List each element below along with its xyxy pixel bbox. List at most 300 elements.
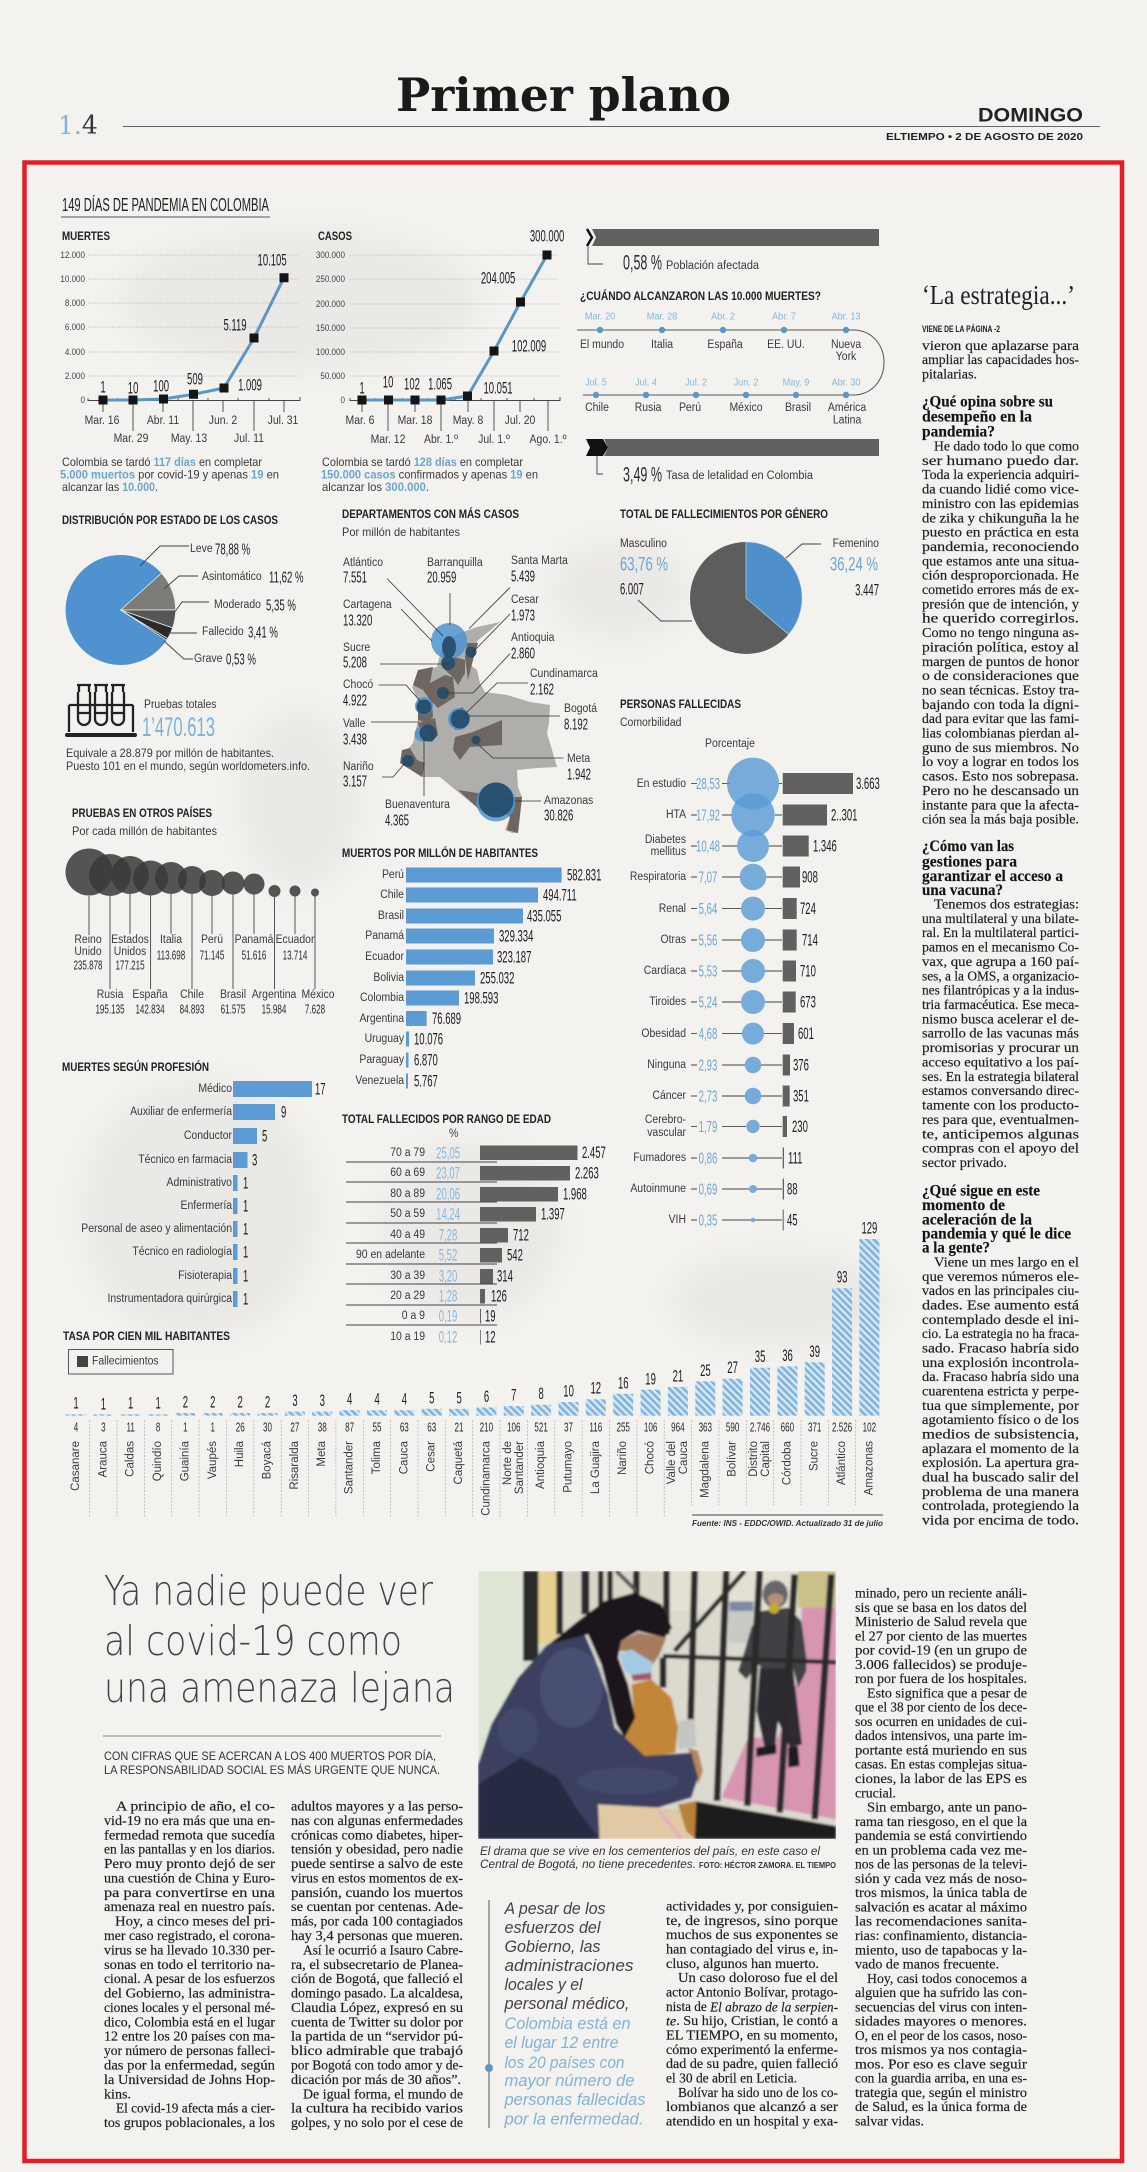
- body column 1: del Gobierno, las administra-: [104, 1987, 275, 2002]
- bar chart: muertes según profesión: Personal de aseo y alimentación: [81, 1223, 232, 1235]
- rate values: 4: [402, 1390, 407, 1408]
- interview column: [922, 280, 1080, 1528]
- comorbidity chart: personas fallecidas: 0,86: [699, 1149, 717, 1167]
- pull quote: Gobierno, las: [504, 1938, 600, 1956]
- answer 1: piración política, estoy al: [922, 640, 1079, 655]
- answer 1: no sean técnicas. Estoy tra-: [922, 684, 1079, 698]
- map: departamentos con más casos: Chocó: [343, 679, 373, 691]
- chart heading: MUERTES: [62, 229, 110, 243]
- chart: casos: 10.051: [483, 379, 513, 397]
- answer 2: acceso equitativo a los paí-: [922, 1056, 1079, 1070]
- hatched bars: [66, 1239, 879, 1416]
- department names: Guainía: [179, 1440, 191, 1481]
- question 1: pandemia?: [922, 424, 995, 440]
- bubble chart: pruebas en otros países: Por cada millón de habitantes: [72, 824, 217, 838]
- bar chart: muertes según profesión: Instrumentadora quirúrgica: [107, 1293, 233, 1305]
- table chart: fallecidos por rango de edad: 1.397: [541, 1205, 565, 1223]
- comorbidity chart: personas fallecidas: 0,69: [699, 1180, 717, 1198]
- table chart: fallecidos por rango de edad: 12: [485, 1328, 496, 1346]
- answer 2: ral. En la multilateral partici-: [922, 926, 1079, 941]
- body column 2: domingo pasado. La alcaldesa,: [291, 1987, 463, 2002]
- comorbidity chart: personas fallecidas: Cáncer: [652, 1090, 686, 1102]
- bar chart: muertes según profesión: Técnico en radiología: [132, 1246, 233, 1258]
- timeline: cuándo alcanzaron las 10.000 muertes: Mar. 28: [647, 311, 678, 323]
- answer 3: Viene un mes largo en el: [934, 1256, 1079, 1270]
- pull quote: esfuerzos del: [504, 1919, 602, 1937]
- chart: muertes: 6.000: [65, 322, 85, 332]
- bar chart: muertos por millón de habitantes: [342, 845, 601, 1090]
- answer 3: controlada, protegiendo la: [922, 1499, 1080, 1514]
- chart note: alcanzar los 300.000.: [322, 480, 429, 494]
- body column 1: El covid-19 afecta más a cier-: [116, 2102, 275, 2117]
- pie heading: TOTAL DE FALLECIMIENTOS POR GÉNERO: [620, 506, 828, 521]
- chart: muertes: Jun. 2: [209, 415, 237, 427]
- death values: 27: [290, 1421, 299, 1435]
- department names: Cauca: [678, 1440, 690, 1474]
- chart heading: MUERTES SEGÚN PROFESIÓN: [62, 1059, 209, 1074]
- answer 1: Toda la experiencia adquiri-: [922, 468, 1079, 483]
- body column 1: [104, 1800, 276, 2131]
- pie chart: distribución por estado: Grave: [194, 653, 222, 665]
- body column 4: salvar vidas.: [855, 2114, 924, 2130]
- body column 3: cluso, algunos han muerto.: [666, 1957, 819, 1972]
- body column 3: han contagiado del virus e, in-: [666, 1942, 838, 1958]
- comorbidity chart: personas fallecidas: 111: [788, 1149, 802, 1167]
- body column 3: te, de ingresos, sino porque: [666, 1914, 838, 1929]
- death values: 8: [156, 1421, 160, 1435]
- map: departamentos con más casos: Sucre: [343, 642, 370, 654]
- chart: muertes: May. 13: [171, 433, 207, 445]
- comorbidity chart: personas fallecidas: 88: [787, 1180, 798, 1198]
- chart: muertes: 1: [100, 378, 106, 396]
- map: departamentos con más casos: Santa Marta: [511, 555, 569, 567]
- pull quote: locales y el: [504, 1976, 584, 1994]
- table chart: fallecidos por rango de edad: 2.457: [582, 1143, 606, 1162]
- body column 2: blico admirable que trabajó: [291, 2044, 463, 2059]
- body column 1: vid-19 no era más que una en-: [104, 1814, 275, 1829]
- comorbidity chart: personas fallecidas: mellitus: [651, 846, 686, 858]
- bar chart: muertos por millón de habitantes: Bolivia: [373, 972, 405, 984]
- pie chart: género: [620, 506, 879, 654]
- timeline: cuándo alcanzaron las 10.000 muertes: Jul. 4: [635, 377, 657, 389]
- department names: Cauca: [398, 1440, 410, 1474]
- bar chart: muertes según profesión: Técnico en farmacia: [138, 1154, 233, 1166]
- department names: Bolívar: [727, 1441, 739, 1477]
- bar chart: muertos por millón de habitantes: 76.689: [432, 1009, 461, 1028]
- comorbidity chart: personas fallecidas: 0,35: [699, 1211, 717, 1229]
- body column 1: kins.: [104, 2087, 131, 2102]
- chart: casos: Ago. 1.º: [530, 434, 566, 446]
- timeline: cuándo alcanzaron las 10.000 muertes: Brasil: [785, 402, 811, 414]
- map of Colombia: [400, 622, 557, 833]
- bubble chart: pruebas en otros países: [66, 805, 335, 1017]
- table chart: fallecidos por rango de edad: 40 a 49: [390, 1229, 425, 1241]
- chart: muertes: 509: [187, 370, 203, 388]
- department names: Arauca: [97, 1440, 109, 1477]
- pull quote: personal médico,: [504, 1995, 630, 2013]
- comorbidity chart: personas fallecidas: 601: [798, 1024, 814, 1043]
- answer 2: res para que, eventualmen-: [922, 1113, 1079, 1128]
- comorbidity chart: personas fallecidas: 5,53: [699, 962, 717, 980]
- death values: 87: [345, 1421, 354, 1435]
- answer 3: contemplado desde el ini-: [922, 1313, 1079, 1328]
- table chart: fallecidos por rango de edad: 19: [485, 1307, 496, 1325]
- body column 2: nas con algunas enfermedades: [291, 1814, 463, 1829]
- body column 4: 3.006 fallecidos) se produje-: [855, 1658, 1027, 1673]
- timeline: cuándo alcanzaron las 10.000 muertes: México: [729, 402, 763, 414]
- map heading: DEPARTAMENTOS CON MÁS CASOS: [342, 506, 519, 521]
- chart note: [321, 455, 538, 494]
- section title: Primer plano: [396, 68, 731, 122]
- table chart: fallecidos por rango de edad: 7,28: [439, 1226, 458, 1244]
- department names: Cesar: [426, 1441, 438, 1472]
- death values: 1: [211, 1421, 215, 1435]
- map: departamentos con más casos: Nariño: [343, 761, 374, 773]
- map: departamentos con más casos: 3.157: [343, 772, 367, 790]
- death values: 210: [480, 1421, 493, 1435]
- chart: muertes: 0: [81, 395, 85, 405]
- department names: Distrito: [748, 1441, 760, 1477]
- bubble chart: pruebas en otros países: Italia: [160, 934, 183, 946]
- department names: Valle del: [666, 1441, 678, 1484]
- bubbles: [727, 758, 779, 1222]
- map: departamentos con más casos: Antioquia: [511, 632, 555, 644]
- death values: 37: [564, 1421, 573, 1435]
- photo caption: FOTO: HÉCTOR ZAMORA. EL TIEMPO: [699, 1861, 836, 1870]
- table chart: fallecidos por rango de edad: 80 a 89: [390, 1188, 425, 1200]
- death values: 26: [236, 1421, 245, 1435]
- answer 2: tria farmacéutica. Ese meca-: [922, 998, 1079, 1013]
- map: departamentos con más casos: 5.208: [343, 653, 367, 671]
- department names: Córdoba: [781, 1440, 793, 1485]
- body column 2: Así le ocurrió a Isauro Cabre-: [303, 1943, 463, 1958]
- body column 1: fermedad remota que sucedía: [104, 1828, 276, 1843]
- comorbidity chart: personas fallecidas: Diabetes: [645, 834, 686, 846]
- answer 1: casos. Esto nos sobrepasa.: [922, 770, 1079, 785]
- table chart: fallecidos por rango de edad: 712: [513, 1226, 529, 1244]
- body column 4: sión y cada vez más de noso-: [855, 1872, 1027, 1887]
- bubble chart: pruebas en otros países: 15.984: [262, 1003, 286, 1017]
- table chart: fallecidos por rango de edad: 0,19: [439, 1307, 457, 1325]
- table chart: fallecidos por rango de edad: 20 a 29: [390, 1290, 425, 1302]
- department names: Santander: [344, 1441, 356, 1494]
- answer 2: nismo busca acelerar el de-: [922, 1012, 1079, 1027]
- timeline: cuándo alcanzaron las 10.000 muertes: Jul. 2: [685, 377, 707, 389]
- map: departamentos con más casos: Cartagena: [343, 599, 392, 611]
- table chart: fallecidos por rango de edad: [342, 1112, 606, 1346]
- question 1: desempeño en la: [922, 408, 1032, 426]
- timeline heading: ¿CUÁNDO ALCANZARON LAS 10.000 MUERTES?: [580, 288, 821, 303]
- chart heading: TOTAL FALLECIDOS POR RANGO DE EDAD: [342, 1112, 551, 1126]
- timeline: cuándo alcanzaron las 10.000 muertes: York: [836, 351, 857, 363]
- bubble chart: pruebas en otros países: 61.575: [221, 1003, 245, 1017]
- body column 4: las recomendaciones sanita-: [855, 1915, 1027, 1930]
- answer 1: margen de puntos de honor: [922, 655, 1079, 670]
- body column 1: una cuestión de China y Euro-: [104, 1872, 275, 1886]
- department names: La Guajira: [590, 1440, 602, 1494]
- rate values: 1: [73, 1394, 79, 1412]
- chart: casos: May. 8: [453, 415, 483, 427]
- bar chart: muertos por millón de habitantes: Ecuador: [365, 951, 404, 963]
- timeline: cuándo alcanzaron las 10.000 muertes: Jun. 2: [734, 377, 758, 389]
- answer 3: vados en las principales ciu-: [922, 1284, 1079, 1299]
- question 1: [922, 394, 1053, 440]
- answer 1: ser humano puedo dar.: [922, 454, 1079, 469]
- table chart: fallecidos por rango de edad: 314: [497, 1267, 513, 1285]
- body column 3: dad de su padre, quien falleció: [666, 2057, 838, 2072]
- body column 3: nista de El abrazo de la serpien-: [666, 2000, 838, 2015]
- bar chart: muertes según profesión: 5: [262, 1127, 268, 1145]
- death values: 363: [699, 1421, 712, 1435]
- chart note: alcanzar las 10.000.: [62, 480, 158, 494]
- table chart: fallecidos por rango de edad: 25,05: [436, 1144, 460, 1162]
- body column 4: rias: confinamiento, distancia-: [855, 1929, 1027, 1944]
- infographic title: 149 DÍAS DE PANDEMIA EN COLOMBIA: [62, 195, 269, 215]
- bar chart: muertos por millón de habitantes: Chile: [380, 889, 404, 901]
- answer 3: aplazara el momento de la: [922, 1442, 1080, 1457]
- death values: 38: [318, 1421, 327, 1435]
- bar chart: muertes según profesión: 1: [243, 1197, 248, 1215]
- death values: 63: [400, 1421, 409, 1435]
- map: departamentos con más casos: Cesar: [511, 594, 539, 606]
- body column 3: cómo experimentó la enferme-: [666, 2043, 838, 2058]
- rate values: 93: [837, 1268, 848, 1286]
- chart: casos: Mar. 12: [371, 434, 405, 446]
- bar chart: muertes según profesión: [62, 1059, 326, 1308]
- body column 4: Hoy, casi todos conocemos a: [867, 1972, 1028, 1987]
- answer 1: He dado todo lo que como: [934, 440, 1079, 454]
- comorbidity chart: personas fallecidas: 2,93: [699, 1056, 717, 1074]
- chart heading: PERSONAS FALLECIDAS: [620, 697, 741, 711]
- rate values: [73, 1219, 877, 1413]
- bar chart: muertes según profesión: 1: [243, 1267, 248, 1285]
- table chart: fallecidos por rango de edad: 3,20: [439, 1267, 458, 1285]
- comorbidity chart: personas fallecidas: Cardíaca: [644, 965, 687, 977]
- department names: Antioquia: [535, 1440, 547, 1489]
- bubble chart: pruebas en otros países: 142.834: [135, 1003, 165, 1017]
- timeline: cuándo alcanzaron las 10.000 muertes: España: [707, 339, 743, 351]
- pruebas totales: Puesto 101 en el mundo, según worldometers.info.: [66, 759, 310, 773]
- death values: 30: [263, 1421, 272, 1435]
- chart: casos: 100.000: [316, 347, 345, 357]
- bubble chart: pruebas en otros países: 51.616: [242, 949, 266, 963]
- stat bar: tasa de letalidad: 3,49 %: [623, 464, 662, 486]
- answer 3: cuarentena estricta y perpe-: [922, 1384, 1079, 1400]
- bar chart: muertos por millón de habitantes: 10.076: [414, 1030, 443, 1048]
- question 3: [922, 1182, 1071, 1256]
- rate values: 39: [809, 1342, 820, 1361]
- body column 4: alguien que ha sufrido las con-: [855, 1986, 1027, 2001]
- rate values: 2: [183, 1393, 188, 1411]
- chart: casos: Abr. 1.º: [424, 434, 458, 446]
- body column 2: por Bogotá con todo amor y de-: [291, 2058, 463, 2074]
- body column 4: rama tan riesgoso, en el que la: [855, 1815, 1028, 1830]
- department names: Huila: [234, 1440, 246, 1467]
- table chart: fallecidos por rango de edad: 60 a 69: [390, 1167, 425, 1179]
- bubble chart: pruebas en otros países: 13.714: [283, 949, 307, 963]
- body column 4: nos de las personas de la televi-: [855, 1858, 1027, 1873]
- table chart: fallecidos por rango de edad: 10 a 19: [390, 1331, 425, 1343]
- comorbidity chart: personas fallecidas: Renal: [659, 902, 686, 915]
- pull quote: el lugar 12 entre: [504, 2034, 618, 2052]
- comorbidity chart: personas fallecidas: 3.663: [856, 774, 880, 793]
- question 2: ¿Cómo van las: [922, 838, 1014, 855]
- department names: Casanare: [70, 1441, 82, 1491]
- table chart: fallecidos por rango de edad: 20,06: [436, 1185, 460, 1203]
- answer 3: sado. Fracaso habría sido: [922, 1342, 1079, 1356]
- map: departamentos con más casos: Bogotá: [564, 703, 598, 715]
- department names: Sucre: [809, 1441, 821, 1471]
- question 2: gestiones para: [922, 854, 1017, 870]
- body column 2: hay 3,4 personas que mueren.: [291, 1929, 463, 1944]
- comorbidity chart: personas fallecidas: vascular: [647, 1127, 686, 1139]
- chart note: [60, 455, 279, 494]
- body column 3: lombianos que alcanzó a ser: [666, 2100, 838, 2115]
- pull quote: A pesar de los: [504, 1900, 606, 1918]
- body column 4: ciones, la labor de las EPS es: [855, 1772, 1027, 1787]
- chart note: 5.000 muertos por covid-19 y apenas 19 en: [60, 468, 279, 482]
- answer 2: tamente con los producto-: [922, 1098, 1079, 1114]
- comorbidity chart: personas fallecidas: Tiroides: [649, 996, 686, 1008]
- death values: 106: [644, 1421, 657, 1435]
- answer 1: pandemia, reconociendo: [922, 540, 1079, 555]
- chart: casos: 102: [404, 375, 420, 393]
- body column 4: secuencias del virus con inten-: [855, 2000, 1027, 2015]
- pie chart: distribución por estado: Moderado: [214, 599, 261, 611]
- timeline: cuándo alcanzaron las 10.000 muertes: Nueva: [831, 339, 862, 351]
- answer 3: vida por encima de todo.: [922, 1513, 1079, 1528]
- bar chart: muertos por millón de habitantes: Venezuela: [355, 1075, 405, 1087]
- answer 1: bajando con toda la digni-: [922, 698, 1079, 713]
- timeline: cuándo alcanzaron las 10.000 muertes: Mar. 20: [585, 311, 616, 323]
- question 2: [922, 838, 1063, 899]
- chart: muertes: Jul. 31: [268, 415, 298, 427]
- chart: muertes: [60, 229, 300, 494]
- chart: muertes: Mar. 16: [85, 415, 119, 427]
- body column 2: [291, 1800, 463, 2131]
- timeline: cuándo alcanzaron las 10.000 muertes: Jul. 5: [585, 377, 607, 389]
- answer 3: da. Fracaso habría sido una: [922, 1370, 1080, 1385]
- timeline: cuándo alcanzaron las 10.000 muertes: Latina: [833, 414, 862, 427]
- department names: Amazonas: [863, 1441, 875, 1495]
- timeline: cuándo alcanzaron las 10.000 muertes: Abr. 30: [832, 377, 861, 389]
- pull quote: por la enfermedad.: [503, 2110, 644, 2128]
- date: ELTIEMPO • 2 DE AGOSTO DE 2020: [886, 131, 1083, 143]
- answer 1: cometido errores más de ex-: [922, 583, 1079, 598]
- map: departamentos con más casos: Buenaventura: [385, 799, 451, 811]
- body column 3: actor Antonio Bolívar, protago-: [666, 1986, 838, 2000]
- timeline: cuándo alcanzaron las 10.000 muertes: Abr. 7: [772, 311, 796, 323]
- department names: Meta: [316, 1440, 328, 1467]
- body column 1: Pero muy pronto dejó de ser: [104, 1857, 275, 1872]
- bar chart: muertes según profesión: Conductor: [184, 1130, 232, 1142]
- rate values: 5: [456, 1389, 462, 1407]
- death values: 55: [373, 1421, 381, 1435]
- answer 1: [922, 440, 1080, 828]
- department names: Santander: [514, 1441, 526, 1494]
- comorbidity chart: personas fallecidas: 2..301: [831, 806, 857, 824]
- body column 1: en las pantallas y en los diarios.: [104, 1843, 275, 1858]
- body column 1: dico, Colombia está en el lugar: [104, 2015, 275, 2030]
- body column 4: vado de manos frecuente.: [855, 1958, 999, 1972]
- bar chart: muertes según profesión: 3: [252, 1151, 258, 1169]
- body column 4: el 27 por ciento de las muertes: [855, 1629, 1027, 1644]
- answer 2: una multilateral y una bilate-: [922, 912, 1079, 927]
- body column 2: golpes, y no solo por el cese de: [291, 2116, 463, 2131]
- source note: Fuente: INS - EDDC/OWID. Actualizado 31 de julio: [692, 1518, 883, 1528]
- article headline: [104, 1567, 455, 1712]
- bar chart: muertes según profesión: Enfermería: [181, 1200, 233, 1212]
- chart: casos: [316, 227, 566, 494]
- pruebas totales: [66, 685, 310, 773]
- map: departamentos con más casos: 20.959: [427, 568, 456, 586]
- body column 1: pa para convertirse en una: [104, 1886, 276, 1901]
- answer 3: agotamiento físico o de los: [922, 1413, 1079, 1428]
- comorbidity chart: personas fallecidas: 714: [802, 931, 818, 949]
- body column 4: miento, uso de tapabocas y la-: [855, 1943, 1027, 1958]
- bubble chart: pruebas en otros países: 7.628: [305, 1003, 325, 1017]
- pie chart: género: 6.007: [620, 580, 644, 598]
- body column 3: [666, 1900, 839, 2130]
- article deck: [104, 1748, 440, 1777]
- department names: Chocó: [645, 1441, 657, 1474]
- answer 3: dual ha buscado salir del: [922, 1470, 1079, 1486]
- body column 4: salvación es acatar al máximo: [855, 1900, 1027, 1915]
- body column 4: sidades mayores o menores.: [855, 2015, 1027, 2030]
- department names: Norte de: [502, 1441, 514, 1485]
- body column 4: casas. En estas complejas situa-: [855, 1758, 1027, 1773]
- bar chart: muertes según profesión: 1: [243, 1290, 248, 1308]
- answer intro: vieron que aplazarse para: [922, 339, 1080, 354]
- pie chart: género: 3.447: [855, 581, 879, 599]
- body column 1: tos grupos poblacionales, a los: [104, 2116, 275, 2131]
- rate values: 27: [727, 1358, 738, 1377]
- chart: casos: 200.000: [316, 299, 345, 309]
- chart heading: MUERTOS POR MILLÓN DE HABITANTES: [342, 845, 538, 860]
- bubble chart: pruebas en otros países: Chile: [180, 989, 204, 1001]
- body column 4: Sin embargo, ante un pano-: [867, 1801, 1027, 1816]
- department names: Boyacá: [262, 1440, 274, 1479]
- continuation tag: VIENE DE LA PÁGINA -2: [922, 324, 1000, 334]
- body column 1: cional. A pesar de los esfuerzos: [104, 1972, 275, 1987]
- answer 2: compras con el apoyo del: [922, 1142, 1079, 1157]
- map: departamentos con más casos: Cundinamarca: [530, 668, 599, 680]
- body column 1: ciones locales y el personal mé-: [104, 2001, 275, 2016]
- timeline: cuándo alcanzaron las 10.000 muertes: EE. UU.: [767, 339, 805, 351]
- question 2: garantizar el acceso a: [922, 868, 1063, 885]
- body column 1: Hoy, a cinco meses del pri-: [115, 1915, 275, 1930]
- answer 1: o de consideraciones que: [922, 669, 1079, 684]
- comorbidity chart: personas fallecidas: 5,56: [699, 931, 717, 949]
- timeline: cuándo alcanzaron las 10.000 muertes: May. 9: [783, 377, 809, 389]
- stat bar: población afectada: 0,58 %: [623, 252, 662, 274]
- timeline: cuándo alcanzaron las 10.000 muertes: América: [828, 402, 867, 414]
- bubble chart: pruebas en otros países: 113.698: [157, 949, 185, 963]
- rate values: 10: [563, 1382, 574, 1400]
- stat bar: población afectada: [587, 229, 879, 274]
- table chart: fallecidos por rango de edad: %: [449, 1128, 458, 1140]
- total figure: 1’470.613: [142, 712, 215, 742]
- body column 4: sis que se basa en los datos del: [855, 1601, 1027, 1616]
- pull quote: Colombia está en: [504, 2015, 630, 2033]
- table chart: fallecidos por rango de edad: 90 en adelante: [356, 1249, 425, 1261]
- comorbidity chart: personas fallecidas: 17,92: [696, 806, 720, 824]
- bubble chart: pruebas en otros países: Reino: [74, 934, 102, 946]
- death values: 102: [863, 1421, 876, 1435]
- answer intro: pitalarias.: [922, 368, 977, 382]
- chart note: Colombia se tardó 128 días en completar: [322, 455, 523, 469]
- pie chart: distribución por estado: 0,53 %: [226, 650, 256, 668]
